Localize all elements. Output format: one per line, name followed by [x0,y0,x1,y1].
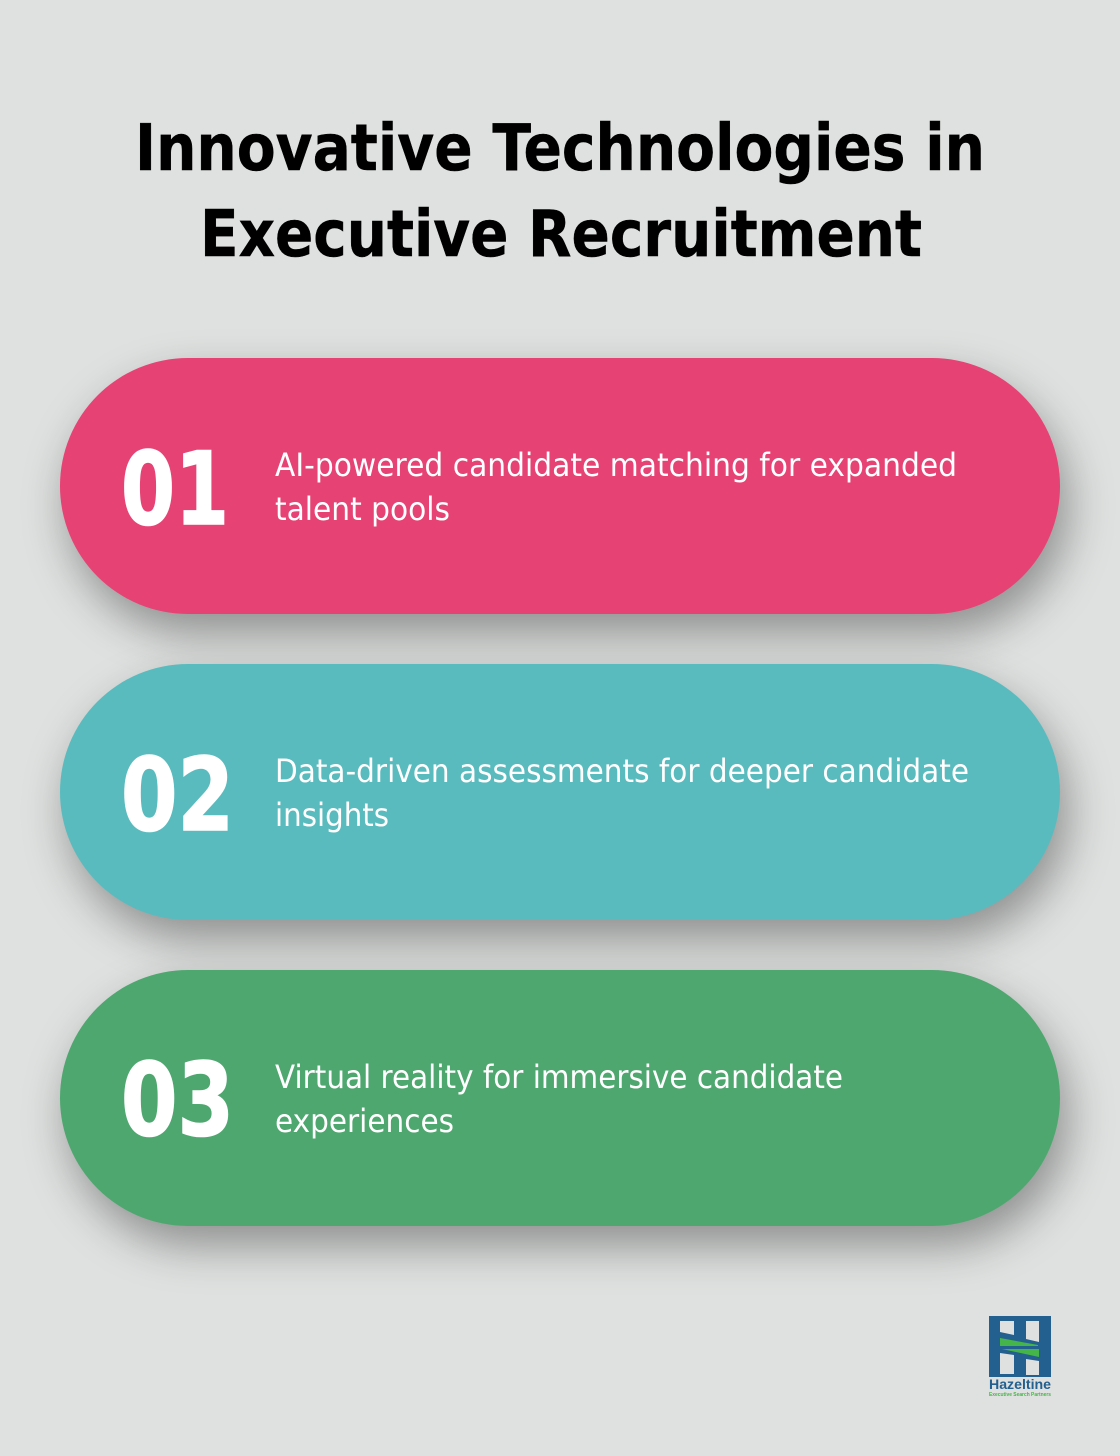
text: item 3 [275,1058,843,1140]
number 02: 02 [121,736,234,854]
number 03: 03 [121,1041,234,1159]
text: item 3: Virtual reality for immersive candidate [275,1058,843,1096]
text: item 2: insights [275,796,389,834]
text: item 1: AI-powered candidate matching for expanded [275,446,957,484]
title [135,112,985,272]
logo: Hazeltine [989,1316,1051,1398]
logo: Hazeltine: Executive Search Partners [989,1392,1051,1398]
text: item 1 [275,446,957,528]
number 01: 01 [121,430,229,548]
logo: Hazeltine: Hazeltine [989,1376,1051,1392]
text: item 2 [275,752,969,834]
text: item 3: experiences [275,1102,454,1140]
panel: item 2 background [60,664,1060,920]
panel: item 3 background [60,970,1060,1226]
panel: item 1 background [60,358,1060,614]
title: Innovative Technologies in [135,112,985,186]
text: item 2: Data-driven assessments for deeper candidate [275,752,969,790]
title: Executive Recruitment [200,198,922,272]
text: item 1: talent pools [275,490,450,528]
